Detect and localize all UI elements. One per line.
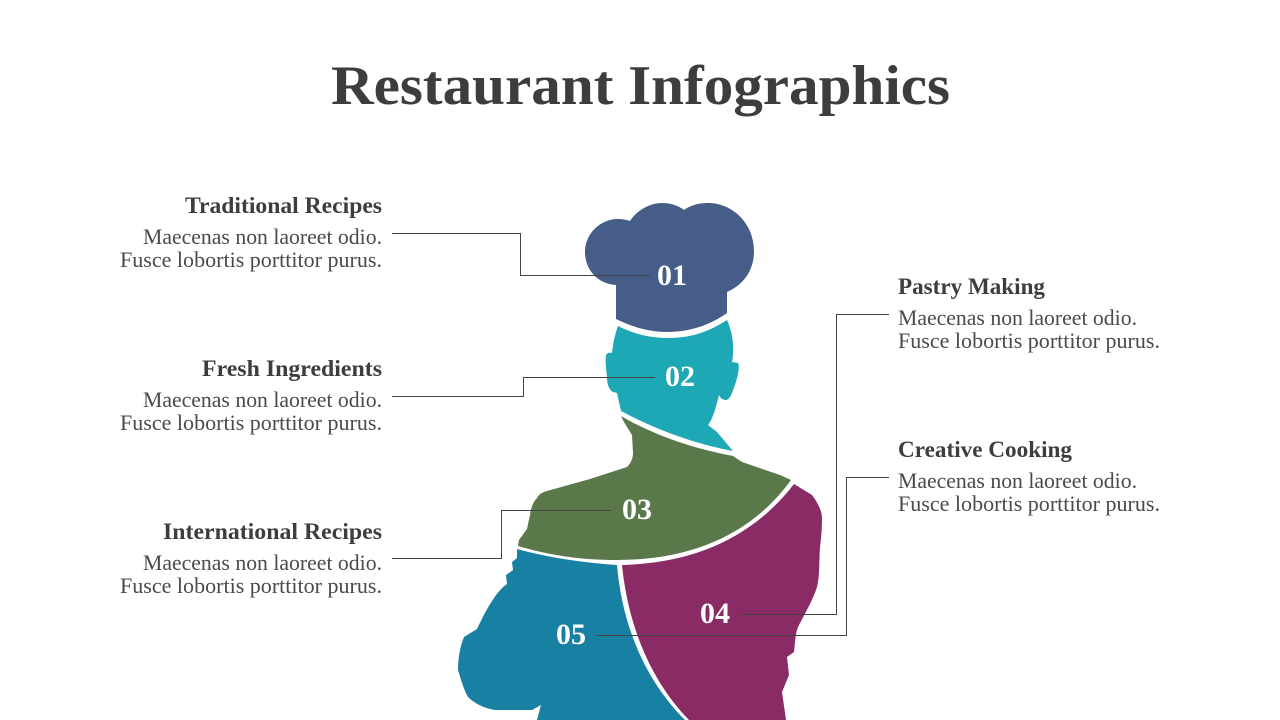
- number 04: 04: [700, 597, 730, 630]
- leader line 01: [392, 234, 650, 276]
- leader line 05: [596, 478, 889, 636]
- text block: International Recipes: Maecenas non laoreet odio.: [143, 550, 382, 575]
- number 05: 05: [556, 618, 586, 651]
- chef figure: [458, 203, 822, 720]
- text block: International Recipes: [120, 519, 382, 598]
- segment 04: right arm: [622, 484, 822, 720]
- text block: International Recipes: Fusce lobortis porttitor purus.: [120, 573, 382, 598]
- text block: Fresh Ingredients: Fusce lobortis porttitor purus.: [120, 410, 382, 435]
- text block: Pastry Making: Maecenas non laoreet odio.: [898, 305, 1137, 330]
- leader line 03: [392, 510, 611, 558]
- text block: Fresh Ingredients: Fresh Ingredients: [202, 356, 382, 381]
- number 01: 01: [657, 259, 687, 292]
- text block: Pastry Making: [898, 274, 1160, 353]
- leader line 02: [392, 378, 655, 396]
- leader line 04: [740, 314, 889, 614]
- text block: Fresh Ingredients: [120, 356, 382, 435]
- number 02: 02: [665, 360, 695, 393]
- segment 03: shoulders: [518, 416, 791, 560]
- text block: Pastry Making: Pastry Making: [898, 274, 1045, 299]
- segment 02: head: [606, 320, 739, 451]
- text block: Creative Cooking: [898, 437, 1160, 516]
- text block: Creative Cooking: Fusce lobortis porttitor purus.: [898, 491, 1160, 516]
- number 03: 03: [622, 493, 652, 526]
- segment 05: left arm: [458, 549, 685, 720]
- text block: Traditional Recipes: Traditional Recipes: [185, 193, 382, 218]
- text block: International Recipes: International Recipes: [163, 519, 382, 544]
- text block: Creative Cooking: Creative Cooking: [898, 437, 1073, 462]
- title: Restaurant Infographics: [331, 55, 950, 117]
- text block: Traditional Recipes: [120, 193, 382, 272]
- text block: Fresh Ingredients: Maecenas non laoreet odio.: [143, 387, 382, 412]
- text block: Traditional Recipes: Maecenas non laoreet odio.: [143, 224, 382, 249]
- text block: Traditional Recipes: Fusce lobortis porttitor purus.: [120, 247, 382, 272]
- text block: Creative Cooking: Maecenas non laoreet odio.: [898, 468, 1137, 493]
- text block: Pastry Making: Fusce lobortis porttitor purus.: [898, 328, 1160, 353]
- segment 01: chef hat: [585, 203, 754, 332]
